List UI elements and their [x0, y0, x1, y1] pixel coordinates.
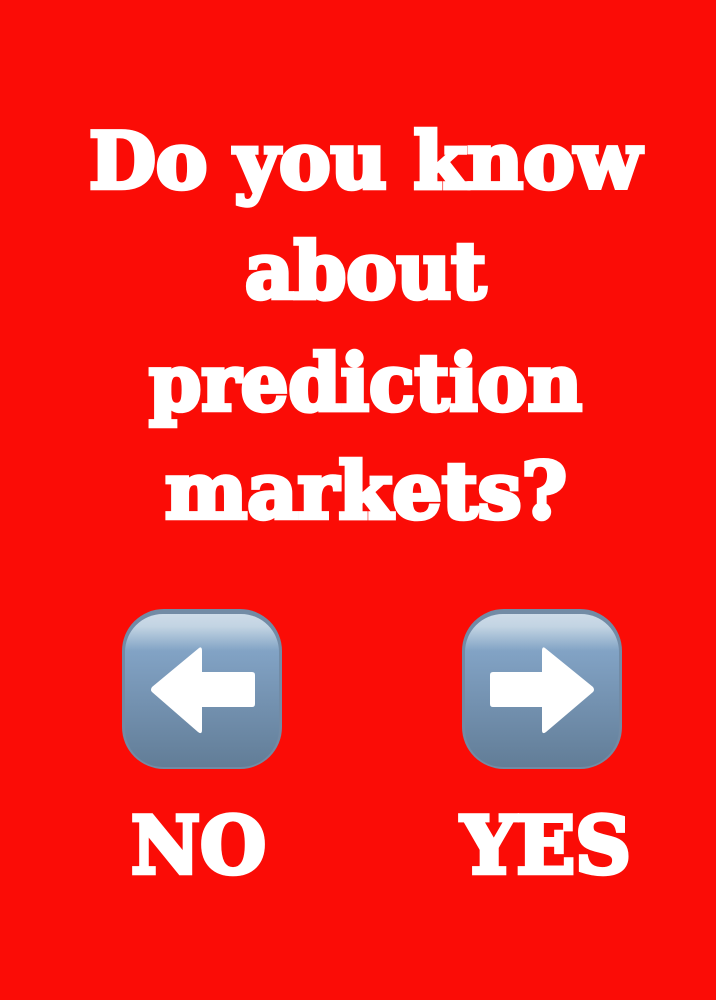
icon: right arrow button	[462, 609, 622, 769]
title: prediction	[149, 338, 582, 429]
title: about	[245, 226, 486, 317]
icon: left arrow button	[122, 609, 282, 769]
title: markets?	[165, 446, 567, 537]
title	[89, 116, 643, 537]
title: Do you know	[89, 116, 643, 207]
label: YES: YES	[460, 799, 631, 892]
label: NO: NO	[131, 799, 266, 892]
